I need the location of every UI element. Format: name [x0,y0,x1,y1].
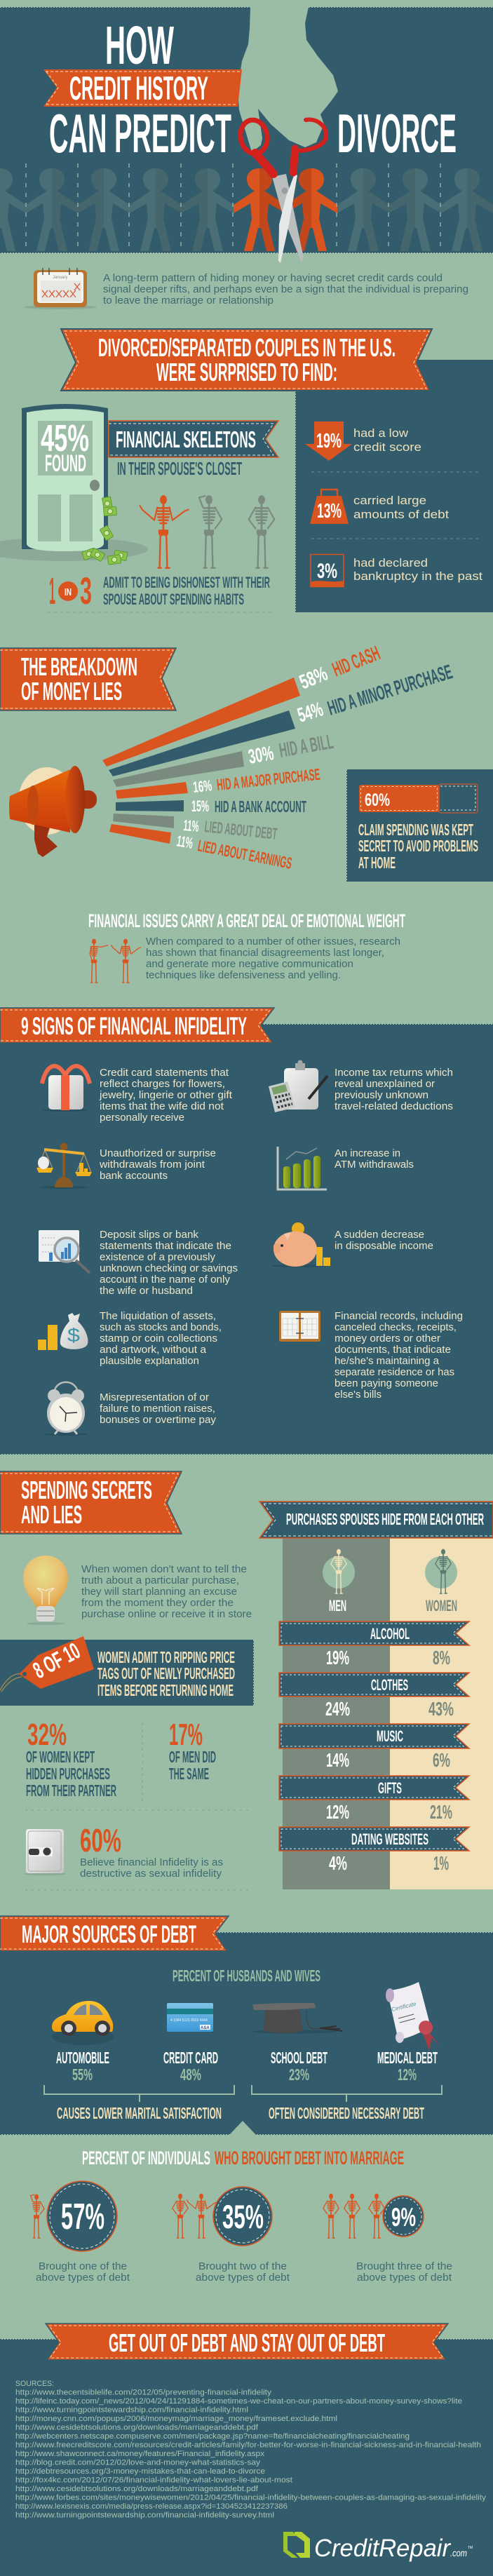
sources list: SOURCES: [15,2380,54,2388]
sign 3: withdrawals: Unauthorized or surprise [100,1148,216,1159]
scissors handles [238,118,326,174]
title ribbon: credit history [43,69,242,107]
stat: 17 percent of men: 17% [169,1718,203,1752]
banner: get out of debt [46,2324,448,2360]
icon: clipboard and calculator [269,1060,327,1112]
sign 8: financial records: canceled checks, receipts, [335,1322,457,1333]
sign 5: deposit slips: Deposit slips or bank [100,1229,199,1241]
stat: 19 percent low credit score: credit score [353,440,421,454]
text: women admit: ITEMS BEFORE RETURNING HOME [97,1681,234,1699]
column: women [390,1538,493,1889]
stat: 19 percent low credit score: had a low [353,426,409,440]
icon: document with magnifying glass [39,1230,90,1273]
sign 5: deposit slips: the wife or husband [100,1286,193,1297]
stat: 57 percent one debt: Brought one of the [39,2261,127,2272]
icon: piggy bank [271,1222,330,1267]
sources list: http://www.lexisnexis.com/media/press-release.aspx?id=1304523412237386 [15,2502,288,2511]
bar: 58 percent hid cash: 58% [297,663,331,694]
bar: 15 percent hid a bank account: 15% [191,797,209,815]
icon: alarm clock [43,1382,88,1436]
sign 8: financial records: money orders or other [335,1333,440,1344]
stat: 9 percent three debts: Brought three of the [356,2261,452,2272]
icon: light bulb [23,1556,68,1625]
debt type: credit card: 48% [180,2065,201,2084]
stat: 3 percent bankruptcy [311,554,482,587]
illustration: closet door with 45 percent [0,404,148,565]
bar: 16 percent hid a major purchase: HID A MAJOR PURCHASE [216,765,321,794]
text: CREDIT CARD [163,2049,218,2067]
ribbon: 9 signs of financial infidelity: 9 SIGNS OF FINANCIAL INFIDELITY [21,1013,247,1040]
stat: 9 percent three debts: above types of debt [357,2272,452,2284]
chart: fan of money lie bars [102,642,455,872]
stat: 19 percent low credit score [305,422,421,461]
sign 8: financial records: else's bills [335,1389,381,1401]
bar: 15 percent hid a bank account: HID A BANK ACCOUNT [215,797,306,816]
sign 7: liquidation of assets: The liquidation of assets, [100,1311,216,1322]
row: gifts: 21% [430,1801,452,1823]
paragraph: women planning excuse: When women don't want to tell the [81,1564,247,1575]
ribbon: spending secrets and lies [0,1471,182,1534]
stat: 13 percent large debt [310,490,449,524]
ribbon: 9 signs of financial infidelity [0,1008,274,1043]
bar: 16 percent hid a major purchase: 16% [192,776,212,796]
icon: credit card: ASA [201,2026,210,2030]
icon: certificate: Certificate [391,2000,417,2013]
panel: 8 of 10 price tags [0,1636,254,1706]
stat: 35 percent two debts: 35% [222,2198,264,2235]
icon: money bag and coins [38,1313,88,1350]
bar: 11 percent lied about debt: LIED ABOUT DEBT [203,817,278,843]
text: women admit: WOMEN ADMIT TO RIPPING PRICE [97,1648,235,1666]
paragraph: women planning excuse [81,1564,252,1620]
stat: 1 in 3: IN [65,586,72,598]
icon: megaphone [9,766,97,857]
icon: certificate [386,1982,440,2051]
icon: money bag and coins: $ [67,1325,80,1346]
bar: 16 percent hid a major purchase [116,765,321,799]
arrow: pointer up [229,2121,256,2135]
logo: creditrepair.com: CreditRepair [314,2535,451,2562]
icon: credit card: 4 1984 5121 0022 4444 [170,2018,208,2023]
paper people chain [0,163,493,251]
sign 8: financial records: Financial records, including [335,1311,463,1322]
ribbon: financial skeletons [109,421,278,457]
row: music: 14% [326,1749,349,1771]
bar: 15 percent hid a bank account [116,797,306,816]
illustration: closet door with 45 percent: FOUND [45,450,86,477]
stat: 3 percent bankruptcy: bankruptcy in the past [353,569,482,583]
logo: creditrepair.com [283,2532,473,2562]
paragraph: financial disagreements: and generate more negative communication [146,959,353,970]
sign 8: financial records: separate residence or has [335,1367,454,1378]
icon: rising bar chart [278,1147,327,1189]
stat: 35 percent two debts: above types of debt [196,2272,290,2284]
banner: divorced separated couples [61,329,432,391]
debt type: school debt: SCHOOL DEBT [271,2049,327,2067]
sign 7: liquidation of assets: plausible explanation [100,1356,199,1367]
sign 2: tax returns: Income tax returns which [335,1067,453,1079]
subheading: percent of husbands and wives: PERCENT OF HUSBANDS AND WIVES [173,1967,320,1985]
section background: sources of debt [0,1932,493,2134]
row: alcohol: 19% [326,1647,349,1668]
header illustration and title [0,7,493,263]
title word: how: HOW [105,15,174,76]
stat: 19 percent low credit score: 19% [316,430,342,452]
section background: footer [0,2340,493,2576]
bar: 11 percent lied about earnings: 11% [175,832,194,852]
skeleton: grey thinking [199,495,222,568]
sign 8: financial records: documents, that indicate [335,1344,451,1356]
header illustration and title: CAN PREDICT [49,102,231,164]
intro paragraph: signal deeper rifts, and perhaps even be a sign that the individual is preparing [103,284,468,295]
stat: 3 percent bankruptcy: had declared [353,556,428,569]
ribbon: the breakdown of money lies [0,648,176,710]
sources list: http://money.cnn.com/popups/2006/moneymag/marriage_money/frameset.exclude.html [15,2415,337,2423]
sources list: http://debtresources.org/3-money-mistakes-that-can-lead-to-divorce [15,2467,265,2476]
sign 2: tax returns: travel-related deductions [335,1101,453,1112]
debt type: automobile: 55% [72,2065,93,2084]
sign 9: misrepresentation: Misrepresentation of or [100,1392,209,1403]
row: alcohol: 8% [433,1647,450,1668]
row: alcohol [279,1621,469,1668]
sign 1: gift: reflect charges for flowers, [100,1079,225,1090]
sources list: http://www.freecreditscore.com/resources/credit-articles/family/for-better-for-worse-in-financial-sickness-and-in-financial-health [15,2441,481,2449]
hand [238,7,338,152]
paragraph: financial disagreements [146,936,400,981]
sources list: http://webcenters.netscape.compuserve.com/men/package.jsp?name=fte/financialcheating/financialcheating [15,2432,410,2441]
sign 1: gift: Credit card statements that [100,1067,229,1079]
icon: spilled money [81,497,128,565]
text: admit to being dishonest: SPOUSE ABOUT SPENDING HABITS [103,591,244,608]
sign 5: deposit slips: unknown checking or savings [100,1263,238,1274]
paragraph: financial disagreements: has shown that financial disagreements last longer, [146,948,384,959]
ribbon: purchases spouses hide [259,1502,493,1538]
stat: 32 percent of women: HIDDEN PURCHASES [26,1765,110,1783]
sign 7: liquidation of assets: and artwork, without a [100,1344,207,1356]
bar: 54 percent hid a minor purchase: 54% [295,699,326,727]
stat: 57 percent one debt: above types of debt [36,2272,130,2284]
paragraph: women planning excuse: truth about a particular purchase, [81,1575,239,1586]
debt type: medical debt [377,1982,440,2084]
stat: 60 percent destructive: 60% [80,1822,121,1859]
figure: women: WOMEN [426,1597,457,1614]
stat: 60 percent destructive: Believe financial Infidelity is as [80,1857,223,1868]
progress bar 60 percent: 60% [365,790,390,810]
progress bar 60 percent [359,784,478,813]
bar: 30 percent hid a bill: 30% [247,742,276,769]
sign 9: misrepresentation: bonuses or overtime pay [100,1415,217,1426]
stat: 32 percent of women [26,1718,116,1800]
icon: arguing skeletons [90,939,140,983]
row: dating websites [279,1827,469,1874]
bar: 30 percent hid a bill: HID A BILL [278,731,335,762]
sign 5: deposit slips [39,1229,238,1297]
ribbon: financial skeletons: FINANCIAL SKELETONS [116,426,256,452]
figure: men: MEN [329,1597,346,1614]
bar: 54 percent hid a minor purchase [109,661,455,776]
stat: 1 in 3: 1 [49,570,55,612]
icon: credit card [167,2003,213,2032]
sign 6: disposable income: in disposable income [335,1241,433,1252]
row: clothes: 24% [325,1698,350,1720]
sign 5: deposit slips: existence of a previously [100,1252,216,1263]
sources list: http://www.cesidebtsolutions.org/downloads/marriageanddebt.pdf [15,2485,259,2493]
sources list: http://lifeinc.today.com/_news/2012/04/24/11291884-sometimes-we-cheat-on-our-partners-about-money-survey-shows?lite [15,2397,462,2406]
sign 7: liquidation of assets [38,1311,222,1367]
bar: 11 percent lied about earnings: LIED ABOUT EARNINGS [196,836,294,872]
row: clothes: CLOTHES [371,1676,408,1694]
paragraph: financial disagreements: When compared to a number of other issues, research [146,936,400,948]
bar: 58 percent hid cash: HID CASH [330,642,384,681]
icon: yellow car [52,2001,114,2045]
intro paragraph: to leave the marriage or relationship [103,295,273,306]
row: gifts: GIFTS [378,1779,402,1797]
stat: 57 percent one debt: 57% [61,2197,104,2237]
stat: 60 percent destructive: destructive as sexual infidelity [80,1868,222,1880]
sources list: http://fox4kc.com/2012/07/26/financial-infidelity-what-lovers-lie-about-most [15,2476,292,2484]
figure: women [425,1549,457,1614]
stat: 1 in 3: 3 [80,570,92,612]
sign 7: liquidation of assets: such as stocks and bonds, [100,1322,222,1333]
sign 2: tax returns: previously unknown [335,1090,428,1101]
skeleton: grey hands on hips [249,495,274,568]
sign 4: atm withdrawals: An increase in [335,1148,400,1159]
row: dating websites: 4% [329,1852,347,1874]
stat: 35 percent two debts: Brought two of the [198,2261,287,2272]
sign 8: financial records: been paying someone [335,1378,438,1389]
icon: balance scales [36,1143,92,1189]
logo: creditrepair.com: TM [468,2546,473,2550]
panel: 8 of 10 price tags: TAGS OUT OF NEWLY PURCHASED [97,1664,235,1683]
sources list: http://blog.credit.com/2012/02/love-and-money-what-statistics-say [15,2459,261,2467]
icon: price tag: 8 OF 10 [29,1638,84,1683]
heading: who brought debt into marriage: PERCENT OF INDIVIDUALS [82,2147,210,2169]
sign 1: gift: personally receive [100,1112,184,1124]
icon: planner book [279,1311,320,1342]
stat: 9 percent three debts: 9% [391,2203,416,2232]
bar: 30 percent hid a bill [113,731,335,787]
skeleton: orange shrugging [140,495,189,568]
row: dating websites: DATING WEBSITES [351,1830,428,1848]
row: gifts: 12% [326,1801,349,1823]
illustration: closet door with 45 percent: 45% [41,417,89,459]
stat: 57 percent one debt [31,2181,130,2284]
sign 3: withdrawals [36,1143,216,1189]
icon: safe [24,1829,66,1875]
bracket and label: lower marital satisfaction [44,2085,234,2122]
sign 9: misrepresentation: failure to mention raises, [100,1403,215,1415]
sources list: http://www.turningpointstewardship.com/financial-infidelity-survey.html [15,2511,274,2519]
sign 6: disposable income [271,1222,433,1267]
ribbon: major sources of debt [0,1916,229,1951]
bar: 11 percent lied about earnings [109,824,294,872]
icon: calendar: January [53,276,67,280]
sign 4: atm withdrawals [278,1147,414,1189]
row: dating websites: 1% [433,1852,449,1874]
bracket and label: lower marital satisfaction: CAUSES LOWER MARITAL SATISFACTION [57,2104,222,2122]
text: OF MEN DID [169,1748,216,1766]
column: men [283,1538,390,1889]
section background: signs of infidelity [0,1024,493,1454]
text: admit to being dishonest [103,574,270,608]
paragraph: women planning excuse: purchase online or receive it in store [81,1609,252,1620]
stat: 17 percent of men [169,1718,216,1783]
sign 8: financial records [279,1311,463,1401]
text: claim spending was kept secret [358,821,478,872]
stat: 35 percent two debts [173,2187,290,2284]
title ribbon: credit history: CREDIT HISTORY [69,69,208,107]
row: music [279,1724,469,1771]
row: alcohol: ALCOHOL [370,1625,410,1643]
debt type: credit card [163,2003,218,2084]
icon: calendar [24,268,97,309]
sources list: http://www.thecentsiblelife.com/2012/05/preventing-financial-infidelity [15,2389,272,2397]
text: FROM THEIR PARTNER [26,1781,116,1800]
stat: 32 percent of women: OF WOMEN KEPT [26,1748,95,1766]
paragraph: financial disagreements: techniques like defensiveness and yelling. [146,970,341,981]
ribbon: the breakdown of money lies: THE BREAKDOWN [21,652,137,681]
stat: 1 in 3 [49,570,92,612]
ribbon: major sources of debt: MAJOR SOURCES OF DEBT [22,1921,196,1948]
icon: gift box [42,1066,90,1112]
row: gifts [279,1776,469,1823]
icon: price tag [0,1636,94,1692]
ribbon: spending secrets and lies: SPENDING SECRETS [21,1476,152,1504]
figure: men [323,1549,355,1614]
sign 4: atm withdrawals: ATM withdrawals [335,1159,414,1171]
text: claim spending was kept secret: AT HOME [358,854,396,872]
text: admit to being dishonest: ADMIT TO BEING DISHONEST WITH THEIR [103,574,270,591]
scissors blades [272,174,304,263]
chart: purchases spouses hide [259,1502,493,1889]
stat: 32 percent of women: 32% [27,1718,67,1752]
banner: divorced separated couples: WERE SURPRISED TO FIND: [156,358,337,386]
sign 6: disposable income: A sudden decrease [335,1229,424,1241]
debt type: automobile [52,2001,114,2084]
stat: 13 percent large debt: amounts of debt [353,508,449,521]
row: music: 6% [433,1749,450,1771]
sign 5: deposit slips: statements that indicate the [100,1241,231,1252]
ribbon: spending secrets and lies: AND LIES [21,1500,82,1529]
section background: title [0,7,493,252]
debt type: automobile: AUTOMOBILE [56,2049,109,2067]
icon: graduation cap [252,2003,342,2034]
row: clothes: 43% [428,1698,454,1720]
sources list: http://www.forbes.com/sites/moneywisewomen/2012/04/25/financial-infidelity-between-couples-as-damaging-as-sexual-infidelity [15,2494,487,2502]
logo: creditrepair.com: .com [450,2547,467,2558]
stat: 3 percent bankruptcy: 3% [317,560,337,583]
paragraph: women planning excuse: they will start planning an excuse [81,1586,237,1598]
sign 1: gift: items that the wife did not [100,1101,224,1112]
sign 2: tax returns: reveal unexplained or [335,1079,435,1090]
sources list: http://www.cesidebtsolutions.org/downloads/marriageanddebt.pdf [15,2424,259,2432]
row: clothes [279,1673,469,1720]
sources list [15,2380,487,2519]
bar: 11 percent lied about debt: 11% [183,816,200,835]
text: IN THEIR SPOUSE'S CLOSET [117,458,242,479]
paragraph: women planning excuse: from the moment they order the [81,1598,234,1609]
debt type: medical debt: 12% [398,2065,417,2084]
sign 1: gift [42,1066,232,1124]
sign 8: financial records: he/she's maintaining a [335,1356,440,1367]
panel: right dark stats panel [295,360,493,612]
stat: 60 percent destructive [80,1822,223,1880]
sign 3: withdrawals: withdrawals from joint [99,1159,205,1171]
sign 1: gift: jewelry, lingerie or other gift [99,1090,232,1101]
stat: 17 percent of men: THE SAME [169,1765,209,1783]
bracket and label: necessary debt [252,2085,442,2122]
sign 3: withdrawals: bank accounts [100,1171,168,1182]
sign 9: misrepresentation [43,1382,217,1436]
sign 5: deposit slips: account in the name of only [100,1274,231,1286]
bar: 11 percent lied about debt [113,814,278,843]
intro paragraph: A long-term pattern of hiding money or having secret credit cards could [103,273,443,284]
row: music: MUSIC [377,1727,403,1745]
bar: 58 percent hid cash [102,642,384,767]
sign 7: liquidation of assets: stamp or coin collections [100,1333,217,1344]
panel: 60 percent avoid problems [346,769,493,882]
debt type: school debt [252,2003,342,2084]
debt type: school debt: 23% [289,2065,309,2084]
ribbon: the breakdown of money lies: OF MONEY LIES [21,677,122,706]
stat: 9 percent three debts [323,2194,452,2284]
intro paragraph [103,273,468,306]
sign 2: tax returns [269,1060,453,1112]
stat: 13 percent large debt: 13% [317,500,342,522]
sources list: http://www.shawconnect.ca/money/features/Financial_infidelity.aspx [15,2450,265,2458]
stat: 13 percent large debt: carried large [353,494,426,507]
text: women admit [97,1648,235,1699]
sources list: http://www.turningpointstewardship.com/financial-infidelity.html [15,2406,248,2414]
